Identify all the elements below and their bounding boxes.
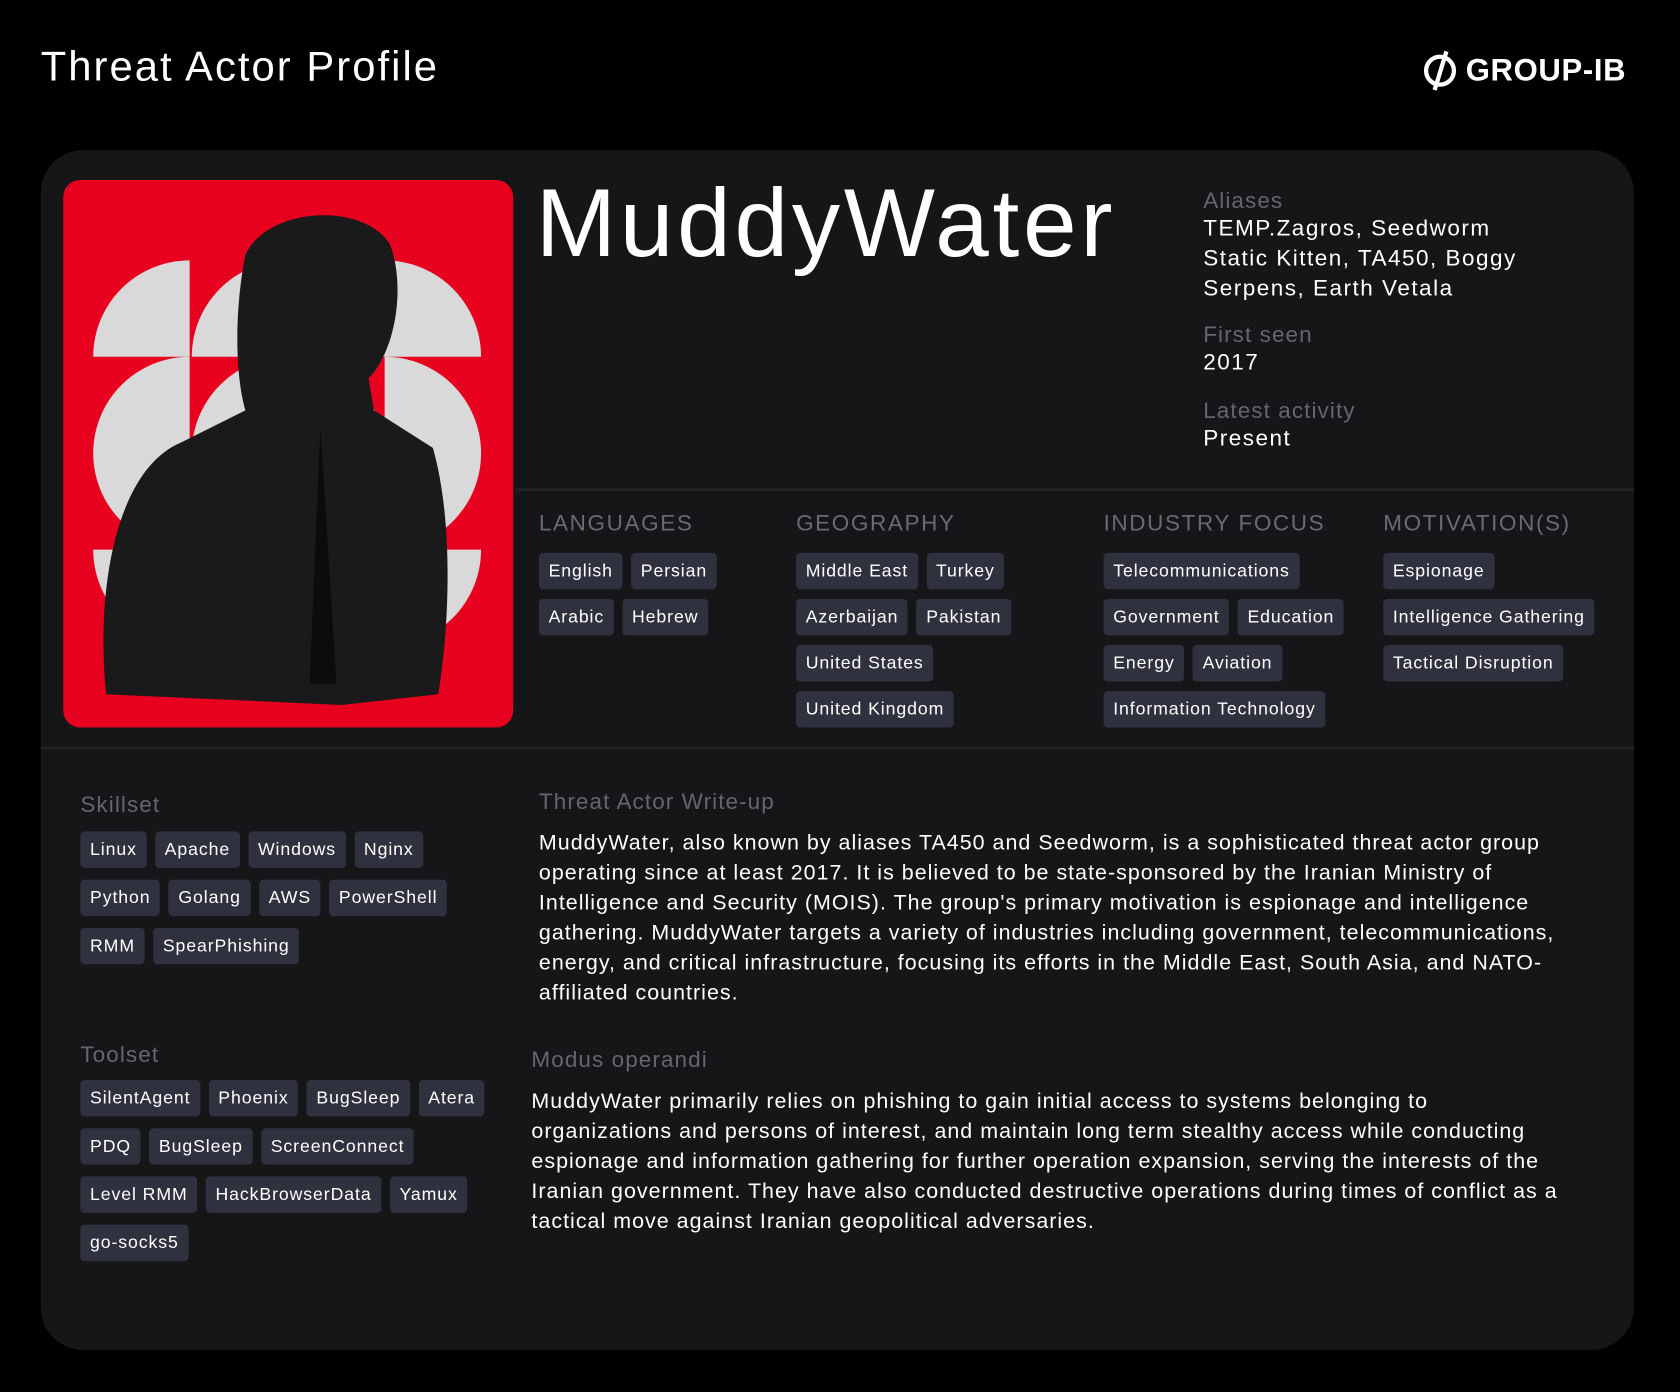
panel: toolset	[80, 1043, 484, 1262]
panel: geography: Pakistan	[926, 608, 1001, 627]
panel: industry focus: Telecommunications	[1113, 561, 1290, 581]
panel: geography	[796, 511, 1012, 728]
panel: toolset: SilentAgent	[90, 1089, 190, 1108]
panel: skillset: Apache	[165, 840, 230, 859]
panel: geography: Middle East	[806, 561, 908, 581]
text block: write-up: operating since at least 2017. It is believed to be state-sponsored by the Iranian Ministry of	[539, 861, 1492, 885]
panel: skillset: Linux	[90, 840, 137, 859]
text block: modus operandi: espionage and information gathering for further operation expansion, serving the interests of the	[531, 1150, 1539, 1173]
panel: geography: United Kingdom	[806, 700, 944, 719]
text block: modus operandi: Modus operandi	[531, 1048, 708, 1073]
panel: industry focus: Energy	[1113, 654, 1175, 673]
panel: skillset: Windows	[258, 840, 336, 859]
panel: toolset: PDQ	[90, 1137, 131, 1156]
aliases block: First seen	[1203, 323, 1313, 347]
panel: motivations: Espionage	[1393, 561, 1485, 581]
panel: industry focus: Aviation	[1203, 654, 1272, 673]
panel: industry focus	[1104, 511, 1344, 728]
panel: skillset	[80, 793, 447, 964]
text block: modus operandi: tactical move against Iranian geopolitical adversaries.	[531, 1210, 1095, 1233]
aliases block: Static Kitten, TA450, Boggy	[1203, 246, 1517, 271]
panel: toolset: Atera	[428, 1089, 475, 1108]
text block: write-up: Intelligence and Security (MOIS). The group's primary motivation is espionage and intelligence	[539, 891, 1529, 915]
aliases block: TEMP.Zagros, Seedworm	[1203, 216, 1491, 241]
panel: toolset: Yamux	[399, 1185, 458, 1204]
panel: geography: United States	[806, 654, 924, 673]
logo: GROUP-IB: GROUP-IB	[1466, 53, 1626, 87]
panel: motivations: MOTIVATION(S)	[1383, 511, 1571, 536]
text block: modus operandi: organizations and persons of interest, and maintain long term stealthy access while conducting	[531, 1120, 1525, 1143]
image: actor portrait	[63, 180, 513, 728]
panel: languages: LANGUAGES	[539, 511, 693, 536]
text block: write-up: affiliated countries.	[539, 981, 739, 1005]
panel: industry focus: Information Technology	[1113, 700, 1316, 719]
panel: industry focus: Government	[1113, 608, 1220, 627]
aliases block	[1203, 189, 1517, 451]
name heading: MuddyWater	[536, 170, 1116, 278]
text block: write-up: Threat Actor Write-up	[539, 790, 775, 814]
panel: toolset: HackBrowserData	[215, 1185, 372, 1204]
panel: skillset: AWS	[269, 888, 311, 908]
panel: toolset: Toolset	[80, 1043, 159, 1067]
panel: skillset: RMM	[90, 936, 135, 956]
panel: languages: Arabic	[549, 608, 604, 627]
panel: skillset: Golang	[178, 888, 241, 908]
text block: write-up: gathering. MuddyWater targets a variety of industries including government, telecommunications,	[539, 921, 1554, 945]
panel: industry focus: INDUSTRY FOCUS	[1104, 511, 1325, 536]
text block: write-up: energy, and critical infrastructure, focusing its efforts in the Middle East, South Asia, and NATO-	[539, 951, 1542, 975]
panel: toolset: ScreenConnect	[271, 1137, 404, 1156]
panel: toolset: BugSleep	[159, 1137, 243, 1156]
panel: skillset: Nginx	[364, 840, 414, 859]
title: Threat Actor Profile	[41, 44, 439, 90]
panel: skillset: SpearPhishing	[163, 936, 290, 956]
panel: skillset: PowerShell	[339, 888, 437, 908]
panel: motivations: Intelligence Gathering	[1393, 608, 1585, 627]
panel: industry focus: Education	[1247, 608, 1334, 627]
panel: toolset: go-socks5	[90, 1233, 179, 1253]
text block: modus operandi	[531, 1048, 1558, 1233]
text block: modus operandi: MuddyWater primarily relies on phishing to gain initial access to systems belonging to	[531, 1090, 1428, 1113]
panel: toolset: BugSleep	[316, 1089, 400, 1108]
aliases block: Latest activity	[1203, 399, 1356, 423]
text block: write-up: MuddyWater, also known by aliases TA450 and Seedworm, is a sophisticated threat actor group	[539, 831, 1540, 855]
panel: geography: GEOGRAPHY	[796, 511, 956, 536]
aliases block: Aliases	[1203, 189, 1283, 213]
panel: toolset: Level RMM	[90, 1185, 188, 1204]
panel: languages: Hebrew	[632, 608, 698, 627]
text block: write-up	[539, 790, 1554, 1005]
logo: GROUP-IB	[1424, 50, 1626, 91]
panel: languages: English	[549, 561, 613, 581]
panel: skillset: Python	[90, 888, 151, 908]
panel: geography: Azerbaijan	[806, 608, 898, 627]
panel: languages: Persian	[641, 561, 707, 581]
panel: toolset: Phoenix	[218, 1089, 289, 1108]
aliases block: Serpens, Earth Vetala	[1203, 276, 1454, 301]
panel: geography: Turkey	[936, 561, 995, 581]
panel: skillset: Skillset	[80, 793, 160, 818]
aliases block: 2017	[1203, 350, 1259, 375]
aliases block: Present	[1203, 426, 1291, 451]
panel: motivations: Tactical Disruption	[1393, 654, 1554, 673]
panel: languages	[539, 511, 717, 636]
text block: modus operandi: Iranian government. They have also conducted destructive operations during times of conflict as a	[531, 1180, 1558, 1203]
panel: motivations	[1383, 511, 1594, 682]
